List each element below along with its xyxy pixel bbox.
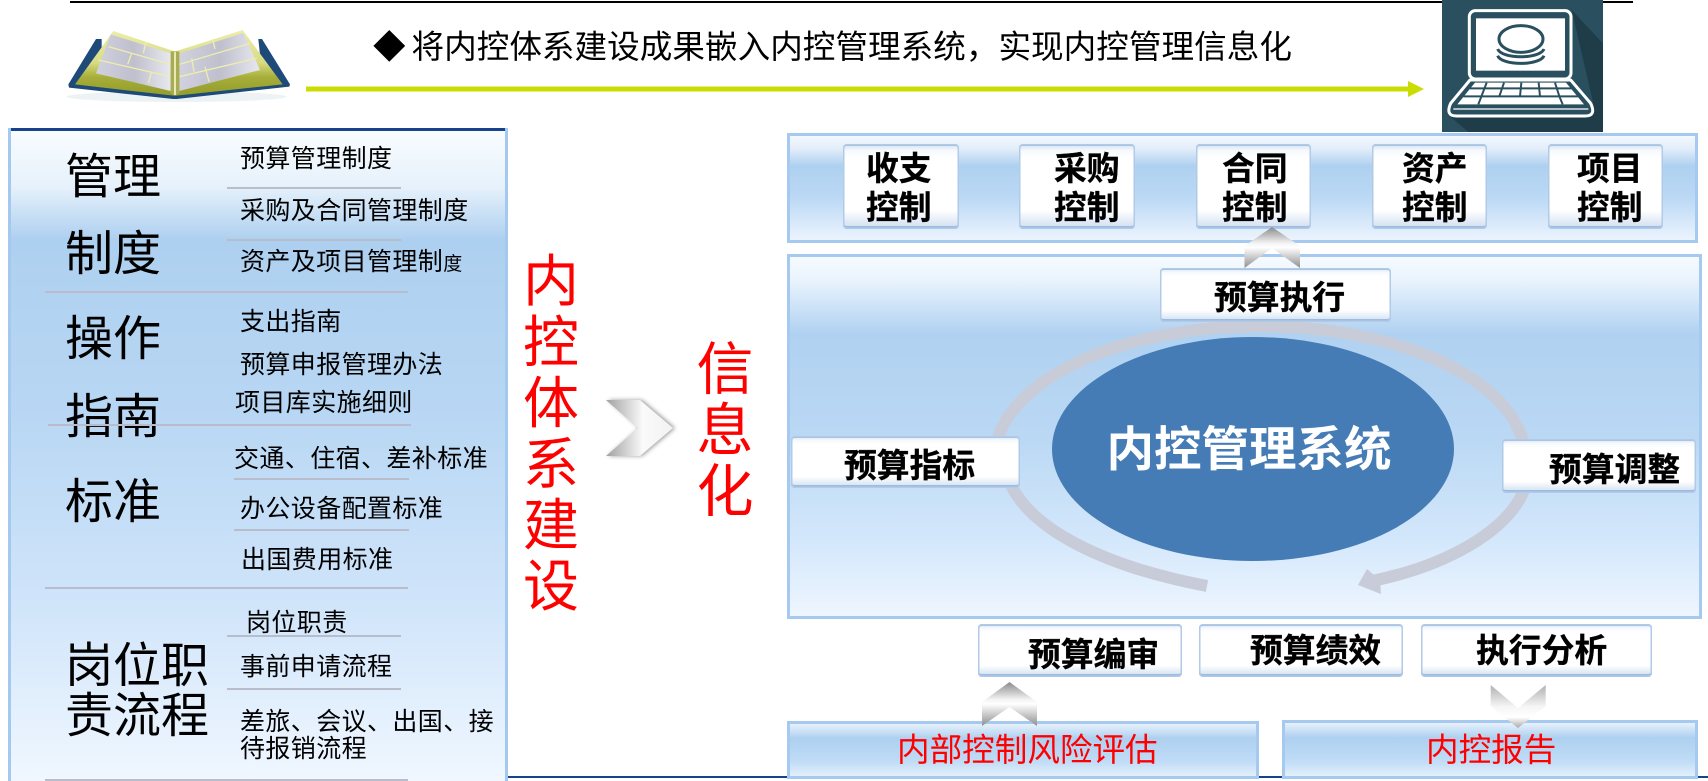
- vertical heading: internal control construction: 设: [523, 555, 579, 618]
- label: internal control report: 内控报告: [1426, 731, 1556, 768]
- button: procurement control: [1019, 144, 1135, 229]
- button: budget compilation: 预算编审: [1028, 636, 1159, 673]
- button: contract control: [1196, 144, 1311, 229]
- arc: lower right ring with arrowhead: [1358, 488, 1525, 594]
- item: procurement and contract rules: 采购及合同管理制度: [240, 197, 469, 225]
- button: asset control: [1372, 144, 1487, 229]
- item: office equipment standards: 办公设备配置标准: [240, 495, 443, 523]
- heading: roles and processes: 岗位职: [65, 640, 209, 693]
- item: budget declaration measures: 预算申报管理办法: [240, 351, 443, 379]
- vertical heading: informatization: 化: [696, 460, 754, 524]
- button: budget execution: 预算执行: [1214, 279, 1345, 316]
- heading: management rules: 管理: [65, 151, 161, 204]
- button: budget adjustment: [1502, 439, 1696, 493]
- arrow: lime arrow to laptop: [306, 81, 1424, 97]
- vertical heading: informatization: [696, 338, 754, 524]
- vertical heading: internal control construction: 建: [523, 494, 579, 557]
- arrow: risk assessment up to budget compilation: [982, 682, 1037, 726]
- title: 将内控体系建设成果嵌入内控管理系统，实现内控管理信息化: [412, 28, 1292, 65]
- panel: internal control system documents: [8, 128, 508, 781]
- button: asset control: 控制: [1402, 189, 1468, 226]
- icon: laptop with database: [1442, 0, 1603, 132]
- button: revenue and expense control: 收支: [866, 150, 932, 187]
- title: ◆: [373, 28, 406, 65]
- heading: operation guide: 操作: [65, 313, 161, 366]
- heading: management rules line 2: 制度: [65, 228, 161, 281]
- heading: roles and processes line 2: 责流程: [65, 690, 209, 743]
- button: procurement control: 控制: [1054, 189, 1120, 226]
- button: budget compilation: [978, 624, 1182, 677]
- button: execution analysis: [1421, 624, 1652, 677]
- button: project control: 控制: [1577, 189, 1643, 226]
- top rule: [70, 1, 1633, 3]
- button: budget indicators: [791, 436, 1020, 488]
- item: asset and project rules: 资产及项目管理制度: [240, 248, 463, 276]
- item: job duties: 岗位职责: [246, 609, 348, 637]
- button: budget execution: [1160, 268, 1391, 322]
- item: pre-application process: 事前申请流程: [240, 653, 392, 681]
- button: budget indicators: 预算指标: [844, 447, 975, 484]
- button: asset control: 资产: [1402, 150, 1468, 187]
- arrow: execution analysis down to report: [1491, 685, 1546, 728]
- arrow: budget execution up to contract control: [1244, 227, 1300, 268]
- item: budget rules: 预算管理制度: [240, 145, 392, 173]
- diagram: budget cycle ring and system ellipse: [992, 322, 1530, 594]
- vertical heading: informatization: 息: [696, 399, 754, 463]
- panel: internal control report: [1282, 720, 1698, 779]
- vertical heading: internal control construction: [523, 250, 579, 618]
- vertical heading: informatization: 信: [696, 338, 754, 402]
- button: contract control: 控制: [1222, 189, 1288, 226]
- button: project control: 项目: [1577, 150, 1643, 187]
- button: budget adjustment: 预算调整: [1549, 451, 1680, 488]
- item: travel standards: 交通、住宿、差补标准: [234, 445, 488, 473]
- bottom navy rule: [508, 776, 1708, 778]
- arc: lower left ring: [1008, 478, 1207, 586]
- vertical heading: internal control construction: 体: [523, 372, 579, 435]
- button: project control: [1548, 144, 1663, 229]
- label: system name: 内控管理系统: [1106, 424, 1392, 477]
- button: revenue and expense control: [843, 144, 959, 229]
- button: budget performance: 预算绩效: [1250, 632, 1381, 669]
- button: revenue and expense control: 控制: [866, 189, 932, 226]
- item: expense guide: 支出指南: [240, 308, 342, 336]
- button: execution analysis: 执行分析: [1476, 632, 1607, 669]
- panel: control modules: [787, 133, 1698, 243]
- button: contract control: 合同: [1222, 150, 1288, 187]
- heading: operation guide line 2: 指南: [65, 391, 161, 444]
- ellipse: system core: [1052, 337, 1454, 561]
- item: overseas expense standards: 出国费用标准: [241, 546, 393, 574]
- label: internal risk assessment: 内部控制风险评估: [897, 731, 1158, 768]
- icon: open book: [66, 30, 290, 102]
- vertical heading: internal control construction: 系: [523, 433, 579, 496]
- panel: internal control management system: [787, 254, 1702, 619]
- vertical heading: internal control construction: 内: [523, 250, 579, 313]
- button: procurement control: 采购: [1054, 150, 1120, 187]
- heading: standards: 标准: [65, 476, 161, 529]
- panel: internal risk assessment: [787, 721, 1259, 779]
- button: budget performance: [1199, 624, 1403, 677]
- vertical heading: internal control construction: 控: [523, 311, 579, 374]
- arc: top ring: [996, 326, 1524, 450]
- item: reimbursement process: 差旅、会议、出国、接待报销流程: [240, 708, 494, 763]
- item: project library rules: 项目库实施细则: [235, 389, 413, 417]
- arrow: chevron right: [606, 397, 676, 459]
